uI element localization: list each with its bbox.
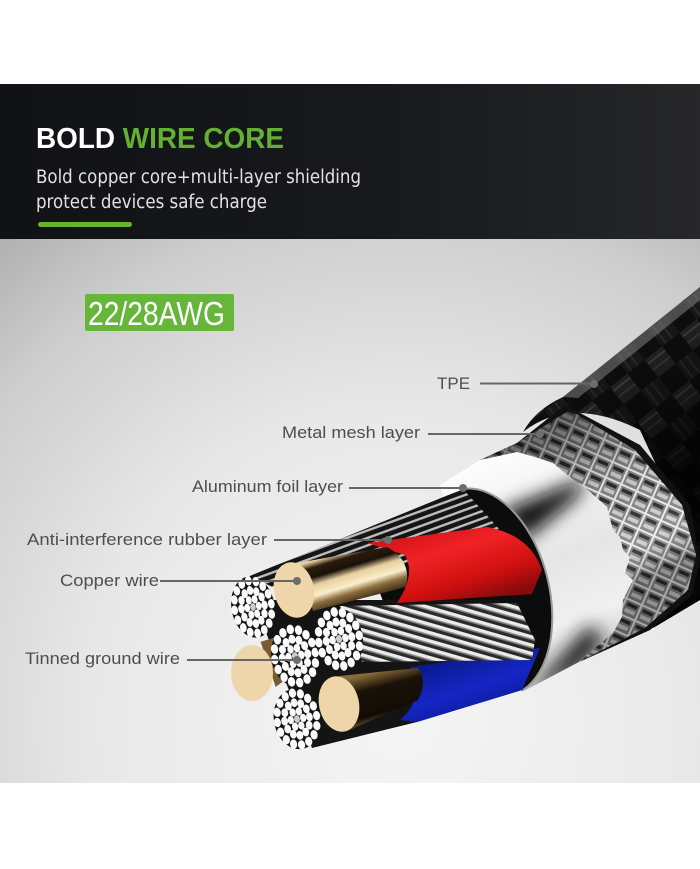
strand end: lower bbox=[268, 684, 326, 754]
label: TPE: TPE bbox=[437, 374, 470, 393]
copper end: top bbox=[269, 558, 319, 622]
foil rim bbox=[463, 489, 552, 690]
silver strand body bbox=[340, 603, 535, 662]
label: Anti-interference rubber layer: Anti-interference rubber layer bbox=[27, 530, 267, 549]
gauge badge: 22/28AWG bbox=[88, 295, 225, 332]
copper strand body left bbox=[260, 638, 283, 687]
label: Anti-interference rubber layer bbox=[27, 530, 392, 549]
rubber layer opening bbox=[360, 489, 552, 700]
label: Copper wire: Copper wire bbox=[60, 571, 159, 590]
copper end: lower bbox=[314, 672, 364, 736]
green accent bar bbox=[38, 222, 132, 227]
braided TPE jacket bbox=[523, 287, 700, 628]
title: BOLD WIRE CORE bbox=[36, 123, 284, 155]
strand end: right bbox=[310, 603, 368, 675]
copper end: left bbox=[231, 645, 273, 701]
cable illustration bbox=[226, 287, 700, 754]
label: Aluminum foil layer bbox=[192, 477, 467, 496]
label: Tinned ground wire: Tinned ground wire bbox=[25, 649, 180, 668]
metal mesh layer bbox=[480, 405, 700, 663]
copper strand body top bbox=[297, 547, 407, 611]
strand end: center bbox=[266, 620, 324, 692]
subtitle: Bold copper core+multi-layer shielding bbox=[36, 167, 361, 188]
copper strand body lower bbox=[339, 668, 423, 732]
label: Aluminum foil layer: Aluminum foil layer bbox=[192, 477, 343, 496]
aluminum foil layer bbox=[440, 452, 633, 695]
label: Copper wire bbox=[60, 571, 301, 590]
label: Metal mesh layer: Metal mesh layer bbox=[282, 423, 420, 442]
red sheath bbox=[367, 527, 542, 603]
label: TPE bbox=[437, 374, 598, 393]
label: Tinned ground wire bbox=[25, 649, 301, 668]
header band bbox=[0, 84, 700, 239]
product photo panel bbox=[0, 239, 700, 783]
blue sheath bbox=[400, 648, 540, 722]
strand end: far left bbox=[226, 572, 280, 642]
dark strands bbox=[249, 490, 500, 588]
label: Metal mesh layer bbox=[282, 423, 544, 442]
conductor bundle bbox=[226, 489, 542, 754]
subtitle: protect devices safe charge bbox=[36, 192, 267, 213]
